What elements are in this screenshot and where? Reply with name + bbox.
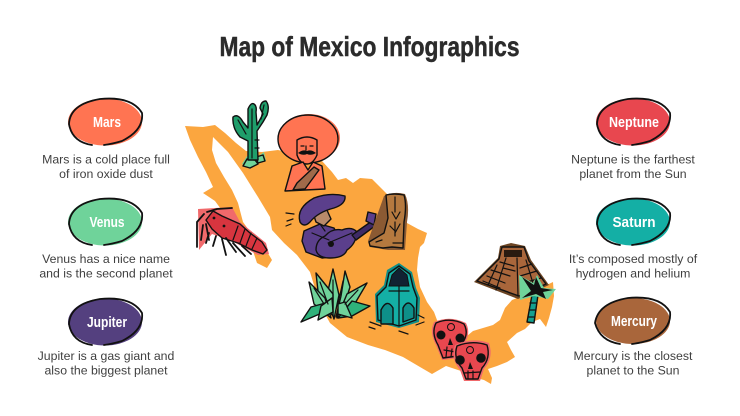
badge: Mars: Mars bbox=[93, 114, 121, 131]
panel: Mercury bbox=[574, 298, 693, 378]
text: Mars description: Mars is a cold place full bbox=[42, 152, 170, 166]
panel: Mars bbox=[42, 98, 170, 181]
icon: cactus bbox=[233, 101, 268, 169]
panel: Jupiter bbox=[38, 298, 175, 378]
text: Saturn description: hydrogen and helium bbox=[576, 266, 690, 280]
icon: mariachi with guitar bbox=[286, 194, 376, 258]
text: Venus description: and is the second planet bbox=[39, 266, 173, 280]
title: Map of Mexico Infographics bbox=[220, 31, 520, 62]
text: Neptune description: Neptune is the farthest bbox=[571, 152, 695, 166]
badge: Jupiter: Jupiter bbox=[87, 314, 127, 331]
map of Mexico bbox=[185, 125, 554, 384]
badge: Venus: Venus bbox=[90, 214, 124, 231]
icon: agave plant bbox=[301, 269, 370, 322]
text: Saturn description: It’s composed mostly of bbox=[569, 252, 698, 266]
panel: Neptune bbox=[571, 98, 695, 181]
badge: Neptune: Neptune bbox=[609, 114, 659, 131]
icon: sugar skull left bbox=[432, 319, 468, 360]
icon: man with sombrero bbox=[278, 114, 340, 191]
icon: monument to the revolution bbox=[369, 263, 424, 334]
badge: Mercury: Mercury bbox=[611, 313, 658, 330]
icon: mayan pyramid bbox=[474, 243, 549, 299]
icon: palm tree bbox=[519, 275, 556, 323]
text: Mercury description: Mercury is the closest bbox=[574, 349, 693, 363]
text: Venus description: Venus has a nice name bbox=[42, 252, 170, 266]
icon: cowboy boot bbox=[368, 193, 408, 250]
icon: lobster bbox=[197, 207, 269, 256]
text: Neptune description: planet from the Sun bbox=[579, 167, 687, 181]
text: Jupiter description: also the biggest planet bbox=[44, 364, 168, 378]
panel: Venus bbox=[39, 198, 173, 280]
text: Mercury description: planet to the Sun bbox=[587, 364, 680, 378]
badge: Saturn: Saturn bbox=[612, 214, 656, 231]
icon: sugar skull right bbox=[453, 340, 491, 381]
text: Mars description: of iron oxide dust bbox=[59, 167, 153, 181]
text: Jupiter description: Jupiter is a gas giant and bbox=[38, 349, 175, 363]
panel: Saturn bbox=[569, 198, 698, 280]
